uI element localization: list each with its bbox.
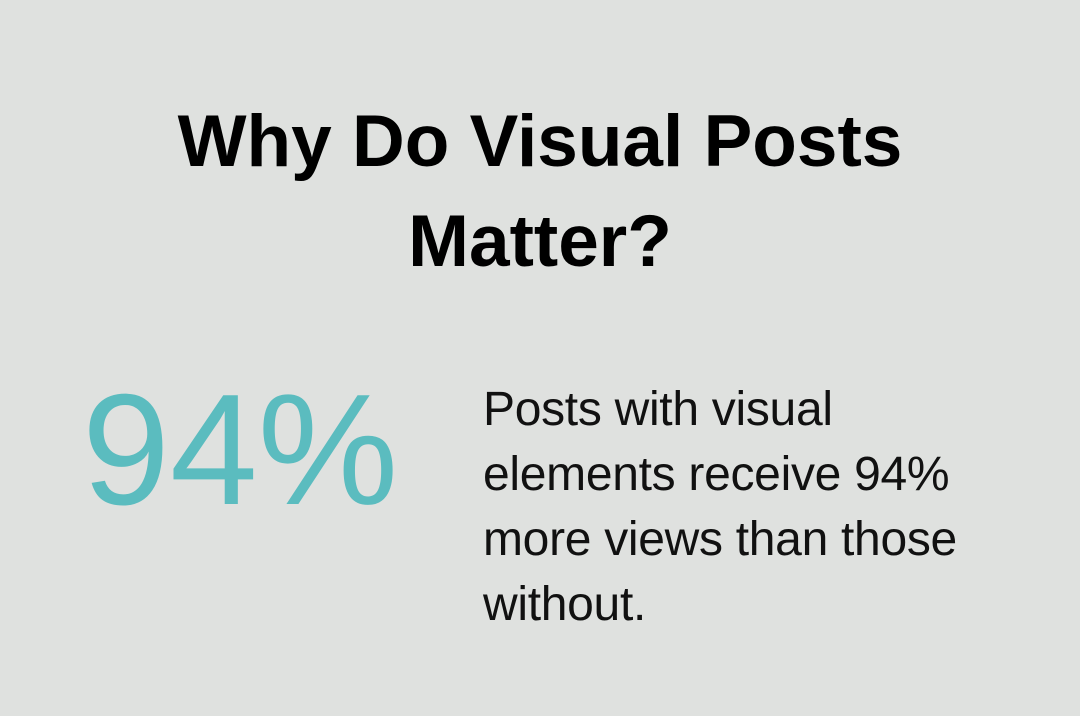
title: Why Do Visual Posts [178, 101, 902, 182]
title [178, 101, 902, 282]
stat description: more views than those [483, 513, 957, 566]
stat description: Posts with visual [483, 383, 833, 436]
title: Matter? [408, 201, 672, 282]
stat description: elements receive 94% [483, 448, 949, 501]
stat description [483, 383, 957, 631]
stat description: without. [483, 578, 646, 631]
big stat: 94%: 94% [82, 362, 398, 538]
